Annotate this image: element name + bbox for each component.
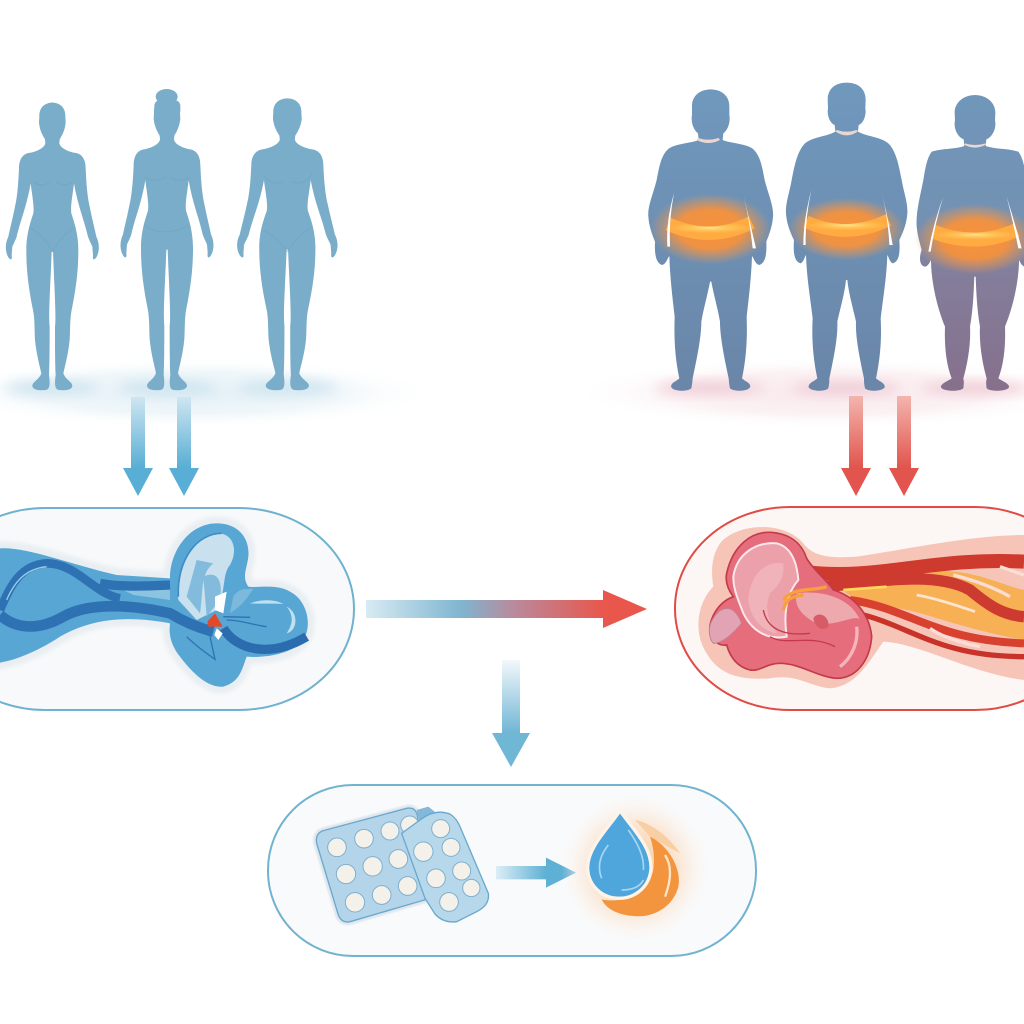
icon: blister pack back (316, 807, 437, 922)
arrow: blue to red horizontal (366, 590, 647, 628)
ear and vessels illustration (0, 523, 308, 687)
panel: obese figures (648, 83, 1024, 391)
panel: inflamed ear (675, 507, 1024, 710)
icon: drop with orange crescent (562, 795, 708, 942)
figure 3 (237, 98, 338, 390)
arrow: blue down left (123, 397, 153, 496)
figure 1 (6, 103, 99, 390)
arrow: blue down right (169, 397, 199, 496)
arrow: pill to drop (496, 858, 576, 888)
floor shadow: healthy group (0, 357, 440, 429)
panel: slim figures (6, 89, 338, 390)
panel: treatment (268, 785, 756, 956)
inflamed ear and vessels illustration (698, 527, 1024, 688)
panel: healthy ear (0, 508, 354, 710)
arrow: down to treatment (492, 660, 530, 767)
arrow: red down right (889, 396, 919, 496)
figure 3 with abdominal glow (914, 95, 1024, 391)
treatment illustration (316, 795, 708, 942)
figure 2 with abdominal glow (786, 83, 907, 391)
figure 2 (120, 89, 213, 390)
floor shadow: obese group (570, 357, 1024, 429)
icon: blister pack front (402, 812, 489, 922)
figure 1 with abdominal glow (648, 89, 773, 391)
arrow: red down left (841, 396, 871, 496)
